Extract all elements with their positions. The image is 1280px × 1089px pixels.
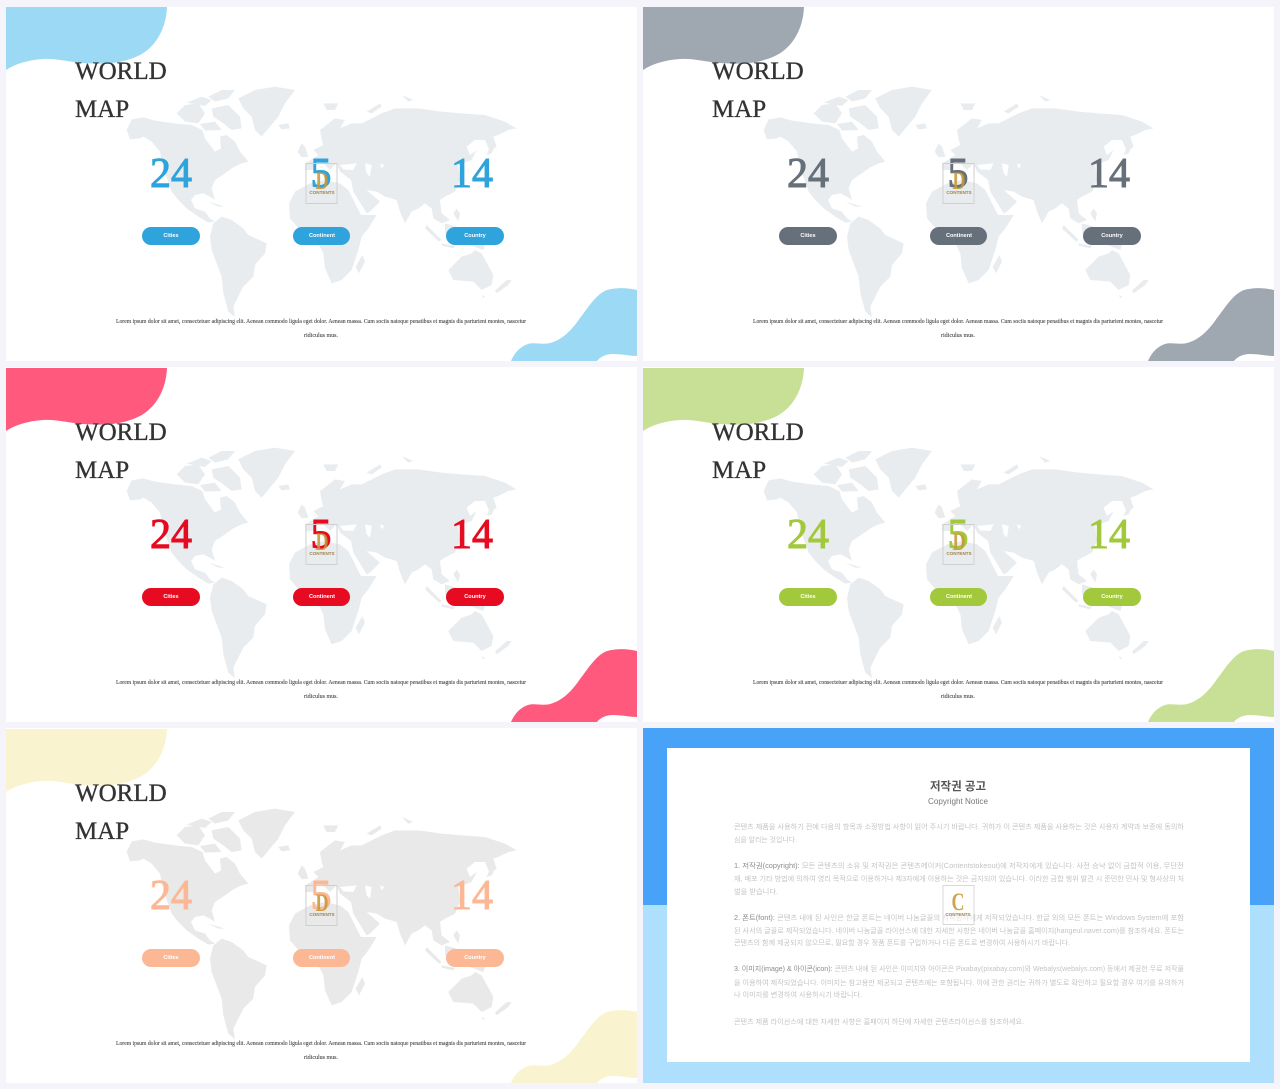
blob: top left: [6, 368, 167, 431]
title: [75, 58, 167, 123]
stat: country: Country: [464, 233, 487, 239]
body text: [753, 680, 1163, 700]
body text: Lorem ipsum dolor sit amet, consectetuer adipiscing elit. Aenean commodo ligula eget dolor. Aenean massa. Cum sociis natoque penatibus et magnis dis parturient montes, nascetur: [116, 680, 526, 686]
stat: country: 14: [1088, 512, 1130, 558]
watermark logo: [943, 886, 974, 924]
panel: blue world map slide: [6, 7, 637, 361]
blob: bottom right: [511, 1010, 637, 1083]
body text: [753, 319, 1163, 339]
watermark logo: D: [952, 529, 966, 556]
title: WORLD: [75, 780, 167, 807]
watermark logo: D: [316, 890, 328, 917]
blob: bottom right: [511, 649, 637, 722]
text block: introduction: 콘텐츠 제품을 사용하기 전에 다음의 항목과 소정방법 사항이 읽어 주시기 바랍니다. 귀하가 이 콘텐츠 제품을 사용하는 것은 사용자 계약과 보증에 동의하: [734, 822, 1185, 831]
title: WORLD: [712, 58, 804, 85]
stat: country: 14: [451, 151, 493, 197]
stat: country: [1083, 151, 1141, 245]
panel: copyright notice: [643, 728, 1274, 1083]
stat: continent: [930, 151, 987, 245]
text block: introduction: [734, 822, 1185, 844]
text block: introduction: 심을 알리는 것입니다.: [734, 835, 797, 844]
title: WORLD: [712, 419, 804, 446]
world map: [759, 87, 1154, 317]
title: MAP: [712, 457, 766, 484]
panel: green world map slide: [643, 367, 1274, 722]
body text: ridiculus mus.: [941, 333, 975, 339]
heading: copyright notice: Copyright Notice: [928, 797, 989, 806]
stat: cities: 24: [787, 512, 829, 558]
stat: continent: [293, 151, 350, 245]
stat: country: 14: [1088, 151, 1130, 197]
text block: copyright: 1. 저작권(copyright): 모든 콘텐츠의 소유 및 저작권은 콘텐츠메이커(Contentstokeout)에 저작자에게 있습니다. 사전 승낙 없이 금합적 이용, 무단전: [734, 861, 1184, 870]
stat: country: [446, 873, 504, 967]
text block: image and icon: [734, 964, 1185, 999]
title: [712, 58, 804, 123]
body text: ridiculus mus.: [304, 1055, 338, 1061]
stat: country: Country: [1101, 233, 1124, 239]
stat: continent: Continent: [309, 233, 335, 239]
watermark logo: C: [952, 889, 964, 916]
stat: cities: 24: [150, 512, 192, 558]
watermark logo: D: [316, 168, 328, 195]
watermark logo: D: [316, 529, 328, 556]
body text: [116, 680, 526, 700]
text block: font: 된 사서의 글꼴로 제작되었습니다. 네이버 나눔글꼴 라이선스에 대한 자세한 사항은 네이버 나눔글꼴 홈페이지(hangeul.naver.com)를 참조하세요. 폰트는: [734, 926, 1185, 935]
panel: gray world map slide: [643, 7, 1274, 361]
blob: top left: [6, 7, 167, 70]
stat: continent: Continent: [309, 955, 335, 961]
stat: cities: Cities: [163, 955, 179, 961]
body text: [116, 1041, 526, 1061]
stat: country: 14: [451, 873, 493, 919]
blob: top left: [643, 7, 804, 70]
stat: country: Country: [464, 594, 487, 600]
body text: ridiculus mus.: [941, 694, 975, 700]
title: MAP: [75, 818, 129, 845]
stat: continent: 5: [948, 151, 968, 197]
title: [75, 780, 167, 845]
stat: cities: Cities: [163, 594, 179, 600]
text block: copyright: 재, 배포 기타 방법에 의하여 영리 목적으로 이용하거나 제3자에게 이용하는 것은 금지되어 있습니다. 이러한 금합 행위 발견 시 준민한 민사 및 형사상의 처: [734, 874, 1184, 883]
stat: country: [446, 512, 504, 606]
stat: continent: 5: [310, 873, 332, 919]
watermark logo: [306, 524, 337, 564]
title: WORLD: [75, 58, 167, 85]
stat: continent: Continent: [309, 594, 335, 600]
stat: continent: Continent: [946, 594, 972, 600]
watermark logo: CONTENTS: [309, 190, 335, 195]
stat: continent: 5: [310, 512, 332, 558]
stat: cities: [142, 151, 200, 245]
text block: font: 콘텐츠의 함께 제공되지 않으므로, 필요할 경우 정품 폰트를 구입하거나 다른 폰트로 변경하여 사용하시기 바랍니다.: [734, 938, 1070, 947]
title: WORLD: [75, 419, 167, 446]
text block: license note: 콘텐츠 제품 라이선스에 대한 자세한 사항은 홈페이지 하단에 자세한 콘텐츠라이선스를 참조하세요.: [734, 1017, 1024, 1026]
stat: cities: [779, 512, 837, 606]
heading: copyright notice: 저작권 공고: [930, 779, 986, 793]
body text: ridiculus mus.: [304, 333, 338, 339]
text block: image and icon: 을 이용하여 제작되었습니다. 이미지는 참고용만 제공되고 콘텐츠에는 포함됩니다. 이에 관한 권리는 귀하가 별도로 확인하고 필요할 경우 여기를 유의하거: [734, 978, 1184, 987]
watermark logo: CONTENTS: [309, 912, 335, 917]
stat: continent: [293, 512, 350, 606]
world map: [122, 87, 517, 317]
stat: cities: [142, 512, 200, 606]
stat: country: Country: [464, 955, 487, 961]
stat: continent: 5: [310, 151, 332, 197]
heading: copyright notice: [928, 779, 989, 806]
text block: font: 2. 폰트(font): 콘텐츠 내에 된 사인은 한글 폰트는 네이버 나눔글꼴의 저작권자에게 저작되었습니다. 한글 외의 모든 폰트는 Windows System에 포함: [734, 913, 1185, 922]
blob: top left: [6, 729, 167, 792]
body text: [116, 319, 526, 339]
body text: ridiculus mus.: [304, 694, 338, 700]
stat: country: [446, 151, 504, 245]
stat: cities: 24: [150, 873, 192, 919]
watermark logo: CONTENTS: [946, 551, 972, 556]
blob: bottom right: [511, 288, 637, 361]
title: MAP: [75, 457, 129, 484]
stat: cities: 24: [787, 151, 829, 197]
stat: continent: Continent: [946, 233, 972, 239]
panel: yellow world map slide: [6, 728, 637, 1083]
stat: cities: Cities: [800, 233, 816, 239]
text block: image and icon: 나 이미지를 변경하여 사용하시기 바랍니다.: [734, 990, 862, 999]
watermark logo: [943, 524, 974, 564]
world map: [122, 448, 517, 678]
stat: cities: [779, 151, 837, 245]
stat: country: Country: [1101, 594, 1124, 600]
stat: cities: 24: [150, 151, 192, 197]
stat: continent: [293, 873, 350, 967]
watermark logo: [943, 164, 974, 204]
blob: bottom right: [1148, 288, 1274, 361]
text block: copyright: [734, 861, 1184, 896]
watermark logo: CONTENTS: [309, 551, 335, 556]
title: [712, 419, 804, 484]
watermark logo: CONTENTS: [945, 912, 971, 917]
stat: country: [1083, 512, 1141, 606]
watermark logo: D: [952, 168, 966, 195]
stat: cities: Cities: [800, 594, 816, 600]
watermark logo: CONTENTS: [946, 190, 972, 195]
stat: country: 14: [451, 512, 493, 558]
title: MAP: [75, 96, 129, 123]
panel: red world map slide: [6, 367, 637, 722]
watermark logo: [306, 164, 337, 204]
blob: bottom right: [1148, 649, 1274, 722]
stat: cities: [142, 873, 200, 967]
body text: Lorem ipsum dolor sit amet, consectetuer adipiscing elit. Aenean commodo ligula eget dolor. Aenean massa. Cum sociis natoque penatibus et magnis dis parturient montes, nascetur: [753, 319, 1163, 325]
text block: image and icon: 3. 이미지(image) & 아이콘(icon): 콘텐츠 내에 된 사인은 이미지와 아이콘은 Pixabay(pixabay.com)와 Webalys(webalys.com) 등에서 제공한 무료 저작물: [734, 964, 1185, 973]
stat: continent: 5: [948, 512, 968, 558]
body text: Lorem ipsum dolor sit amet, consectetuer adipiscing elit. Aenean commodo ligula eget dolor. Aenean massa. Cum sociis natoque penatibus et magnis dis parturient montes, nascetur: [753, 680, 1163, 686]
watermark logo: [306, 886, 337, 926]
text block: copyright: 벌을 받습니다.: [734, 887, 778, 896]
body text: Lorem ipsum dolor sit amet, consectetuer adipiscing elit. Aenean commodo ligula eget dolor. Aenean massa. Cum sociis natoque penatibus et magnis dis parturient montes, nascetur: [116, 319, 526, 325]
body text: Lorem ipsum dolor sit amet, consectetuer adipiscing elit. Aenean commodo ligula eget dolor. Aenean massa. Cum sociis natoque penatibus et magnis dis parturient montes, nascetur: [116, 1041, 526, 1047]
title: MAP: [712, 96, 766, 123]
blob: top left: [643, 368, 804, 431]
stat: continent: [930, 512, 987, 606]
world map: [122, 809, 517, 1039]
world map: [759, 448, 1154, 678]
title: [75, 419, 167, 484]
text block: font: [734, 913, 1185, 947]
stat: cities: Cities: [163, 233, 179, 239]
